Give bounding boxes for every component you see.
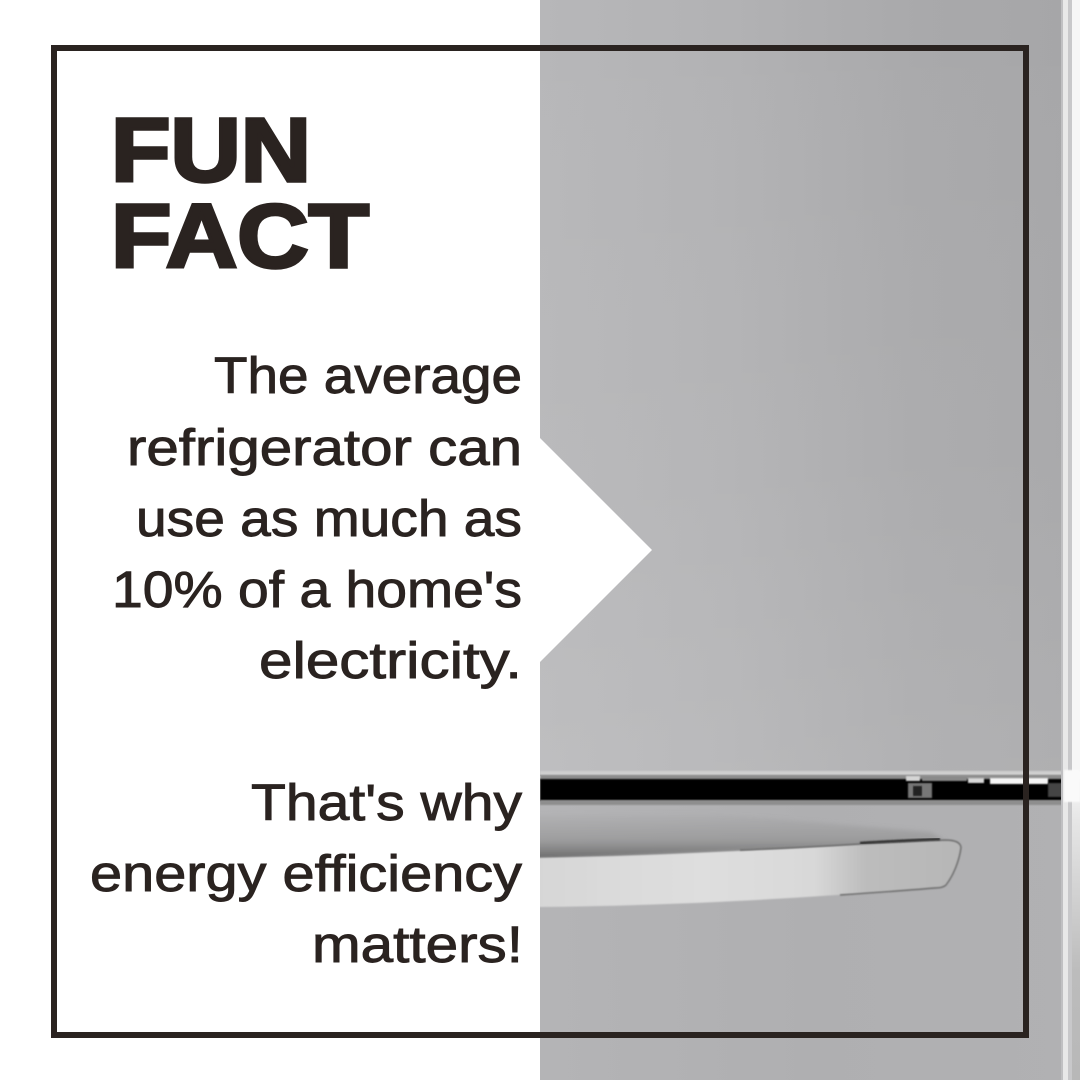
- closing message: That's why: [251, 774, 523, 831]
- lower fridge door: [540, 800, 1080, 1080]
- title: FUN FACT: FUN: [111, 101, 311, 201]
- closing message: matters!: [312, 916, 523, 973]
- upper fridge door: [540, 0, 1080, 776]
- fact text: 10% of a home's: [112, 561, 522, 618]
- title: FUN FACT: [111, 101, 369, 287]
- fact text: use as much as: [136, 490, 522, 547]
- closing message: energy efficiency: [90, 845, 523, 902]
- right edge highlight: [1061, 0, 1080, 1080]
- closing message: [90, 774, 523, 973]
- fact text: [112, 347, 522, 689]
- fact text: refrigerator can: [127, 419, 522, 476]
- fact text: The average: [214, 347, 522, 404]
- refrigerator photo: [530, 0, 1080, 1080]
- handle shadow: [540, 822, 940, 858]
- door gap: [540, 771, 1065, 805]
- fact text: electricity.: [259, 632, 522, 689]
- title: FUN FACT: FACT: [111, 187, 369, 287]
- white pointer arrow: [540, 438, 652, 662]
- refrigerator handle: [530, 839, 961, 907]
